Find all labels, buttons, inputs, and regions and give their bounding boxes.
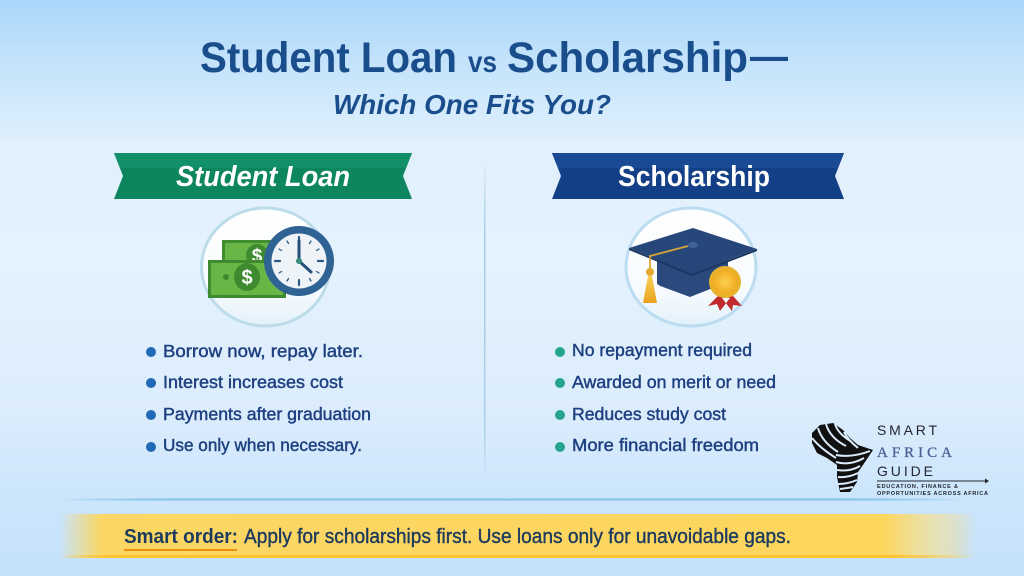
title: Student Loan xyxy=(200,34,457,82)
icon: graduation cap and medal xyxy=(626,208,757,326)
logo text: SMART xyxy=(877,422,937,438)
panel: scholarship xyxy=(552,153,844,455)
panel: student loan xyxy=(114,153,412,455)
logo: Smart Africa Guide xyxy=(812,422,989,497)
logo text: OPPORTUNITIES ACROSS AFRICA xyxy=(877,491,988,497)
logo text: EDUCATION, FINANCE & xyxy=(877,484,958,490)
logo text: GUIDE xyxy=(877,463,933,479)
callout: smart order: Smart order: xyxy=(124,526,238,548)
callout: smart order: Apply for scholarships first. Use loans only for unavoidable gaps. xyxy=(244,526,791,548)
bullet list: scholarship: Awarded on merit or need xyxy=(572,372,776,392)
bullet list: scholarship: Reduces study cost xyxy=(572,404,726,424)
banner: student loan: Student Loan xyxy=(176,161,350,193)
bullet list: loan xyxy=(146,341,371,455)
subtitle: Which One Fits You? xyxy=(333,89,611,120)
bullet list: loan: Interest increases cost xyxy=(163,372,343,392)
bullet list: scholarship: No repayment required xyxy=(572,340,752,360)
title: — xyxy=(750,32,788,79)
logo text xyxy=(877,422,989,497)
title xyxy=(200,32,788,82)
bullet list: scholarship: More financial freedom xyxy=(572,435,759,455)
callout: smart order xyxy=(60,514,975,558)
clock xyxy=(264,226,334,296)
icon: money and clock: $ xyxy=(252,246,263,267)
banner: scholarship xyxy=(552,153,844,199)
bullet list: loan: Payments after graduation xyxy=(163,404,371,424)
icon: money and clock xyxy=(202,208,334,326)
banner: student loan xyxy=(114,153,412,199)
banner: scholarship: Scholarship xyxy=(618,161,770,193)
bullet list: loan: Use only when necessary. xyxy=(163,435,362,455)
bullet list: scholarship xyxy=(555,340,776,455)
bullet list: loan: Borrow now, repay later. xyxy=(163,341,363,361)
logo text: AFRICA xyxy=(877,445,952,461)
icon: zebra-striped Africa xyxy=(812,423,873,492)
title: vs xyxy=(468,46,497,79)
title: Scholarship xyxy=(507,34,748,82)
icon: money and clock: $ xyxy=(241,267,253,289)
